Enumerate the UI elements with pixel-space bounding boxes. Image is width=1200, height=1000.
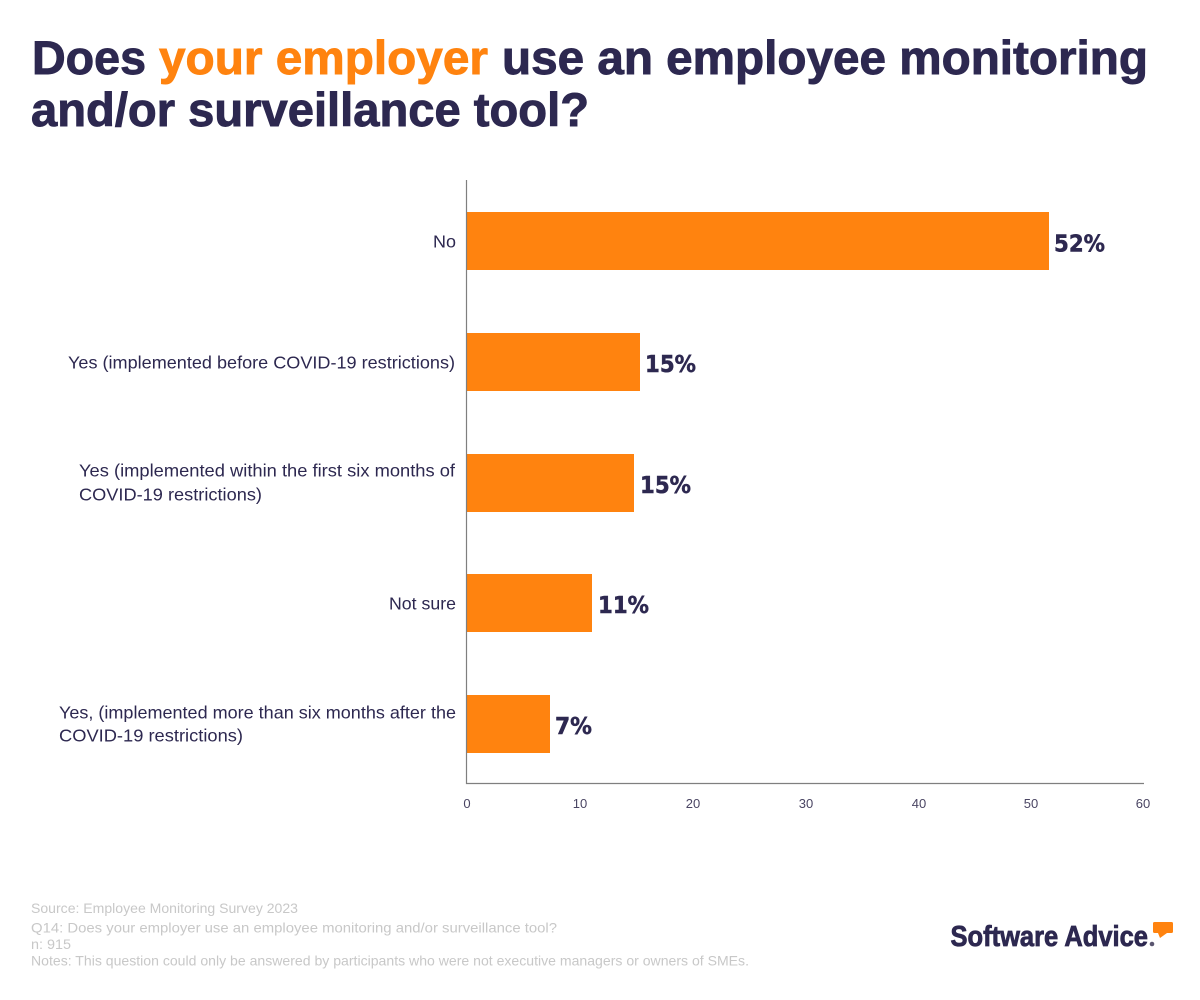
x axis ticks: 0	[463, 796, 471, 811]
source notes: Q14: Does your employer use an employee monitoring and/or surveillance tool?	[31, 920, 557, 936]
x axis ticks	[463, 796, 1150, 811]
bars	[467, 212, 1049, 753]
source notes: Notes: This question could only be answered by participants who were not executive managers or owners of SMEs.	[31, 952, 749, 968]
x axis ticks: 20	[686, 796, 700, 811]
title: use an employee monitoring	[502, 31, 1148, 84]
category labels: Yes (implemented within the first six months of	[79, 460, 455, 480]
value labels	[555, 230, 1105, 740]
title: and/or surveillance tool?	[31, 83, 589, 136]
value labels: 15%	[645, 350, 696, 378]
x axis ticks: 40	[912, 796, 926, 811]
title: Does	[32, 31, 146, 84]
category labels: Not sure	[389, 593, 456, 613]
category labels: Yes, (implemented more than six months after the	[59, 702, 456, 722]
value labels: 52%	[1054, 230, 1105, 258]
category labels: No	[433, 231, 456, 251]
title	[31, 31, 1148, 136]
title: your employer	[159, 31, 488, 84]
axes	[466, 180, 1144, 784]
x axis ticks: 60	[1136, 796, 1150, 811]
source notes: n: 915	[31, 936, 71, 952]
x axis ticks: 50	[1024, 796, 1038, 811]
bar chart	[59, 180, 1150, 811]
category labels	[59, 231, 456, 745]
category labels: COVID-19 restrictions)	[59, 725, 243, 745]
x axis ticks: 10	[573, 796, 587, 811]
value labels: 11%	[598, 591, 649, 619]
value labels: 15%	[640, 471, 691, 499]
source notes	[31, 900, 749, 968]
category labels: COVID-19 restrictions)	[79, 484, 262, 504]
source notes: Source: Employee Monitoring Survey 2023	[31, 900, 298, 916]
icon: speech bubble	[1153, 922, 1173, 938]
value labels: 7%	[555, 712, 592, 740]
logo: Software Advice: Software Advice	[950, 921, 1148, 953]
category labels: Yes (implemented before COVID-19 restrictions)	[68, 352, 455, 372]
x axis ticks: 30	[799, 796, 813, 811]
